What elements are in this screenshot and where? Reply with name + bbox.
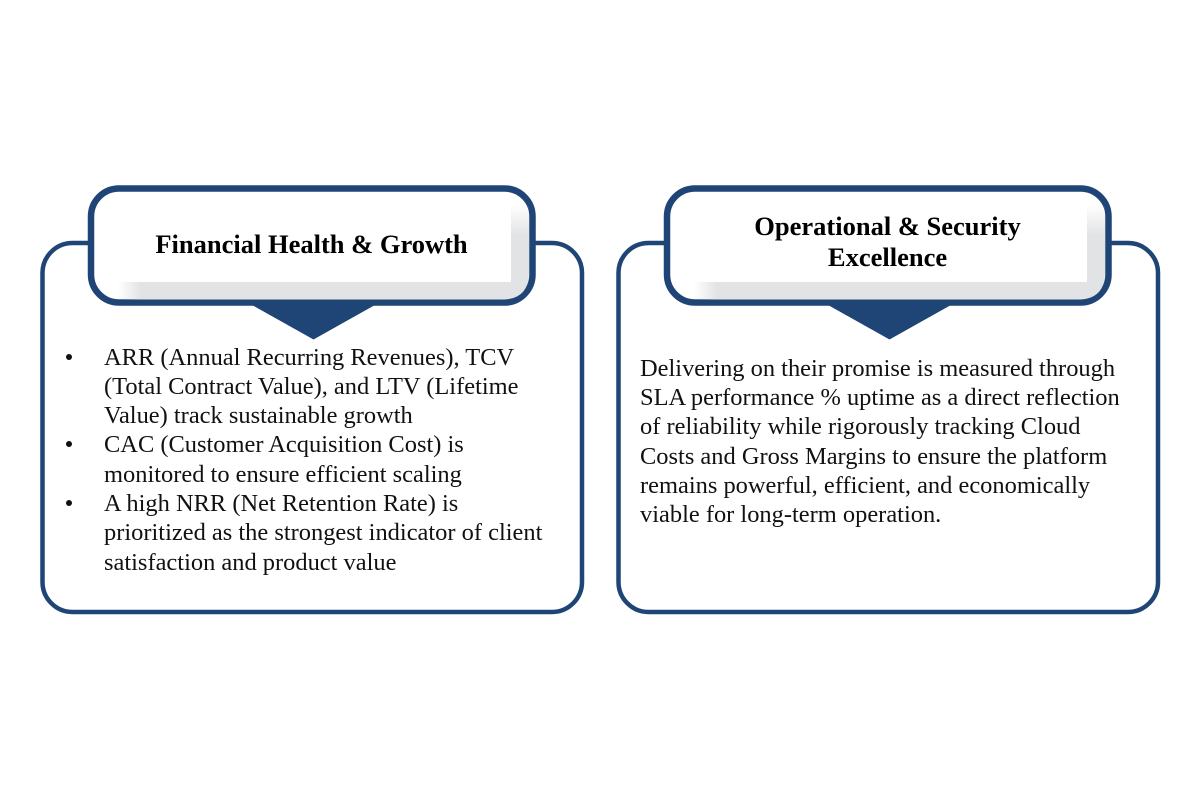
bullet list: CAC (Customer Acquisition Cost) is — [104, 431, 464, 458]
panel: Financial Health & Growth — [42, 188, 582, 612]
body paragraph: SLA performance % uptime as a direct reflection — [640, 384, 1120, 411]
heading box — [91, 188, 532, 302]
body paragraph — [640, 355, 1120, 528]
bullet list: (Total Contract Value), and LTV (Lifetime — [104, 373, 519, 400]
bullet list: Value) track sustainable growth — [104, 402, 413, 429]
pointer arrow — [828, 305, 951, 340]
heading text: Operational & Security — [754, 211, 1021, 241]
body paragraph: Costs and Gross Margins to ensure the platform — [640, 443, 1107, 470]
pointer arrow — [252, 305, 375, 340]
panel body outline — [618, 243, 1158, 612]
bullet list: monitored to ensure efficient scaling — [104, 461, 462, 488]
heading text: Financial Health & Growth — [155, 229, 468, 259]
heading box — [667, 188, 1108, 302]
bullet list: A high NRR (Net Retention Rate) is — [104, 490, 458, 517]
panel body outline — [42, 243, 582, 612]
bullet list — [66, 344, 543, 576]
bullet list: ARR (Annual Recurring Revenues), TCV — [104, 344, 515, 371]
body paragraph: of reliability while rigorously tracking Cloud — [640, 413, 1080, 440]
body paragraph: remains powerful, efficient, and economically — [640, 472, 1091, 499]
bullet list: satisfaction and product value — [104, 549, 396, 576]
panel: Operational & Security Excellence — [618, 188, 1158, 612]
body paragraph: viable for long-term operation. — [640, 501, 941, 528]
body paragraph: Delivering on their promise is measured through — [640, 355, 1115, 382]
heading box: Excellence — [828, 242, 947, 272]
bullet list: prioritized as the strongest indicator of client — [104, 519, 543, 546]
